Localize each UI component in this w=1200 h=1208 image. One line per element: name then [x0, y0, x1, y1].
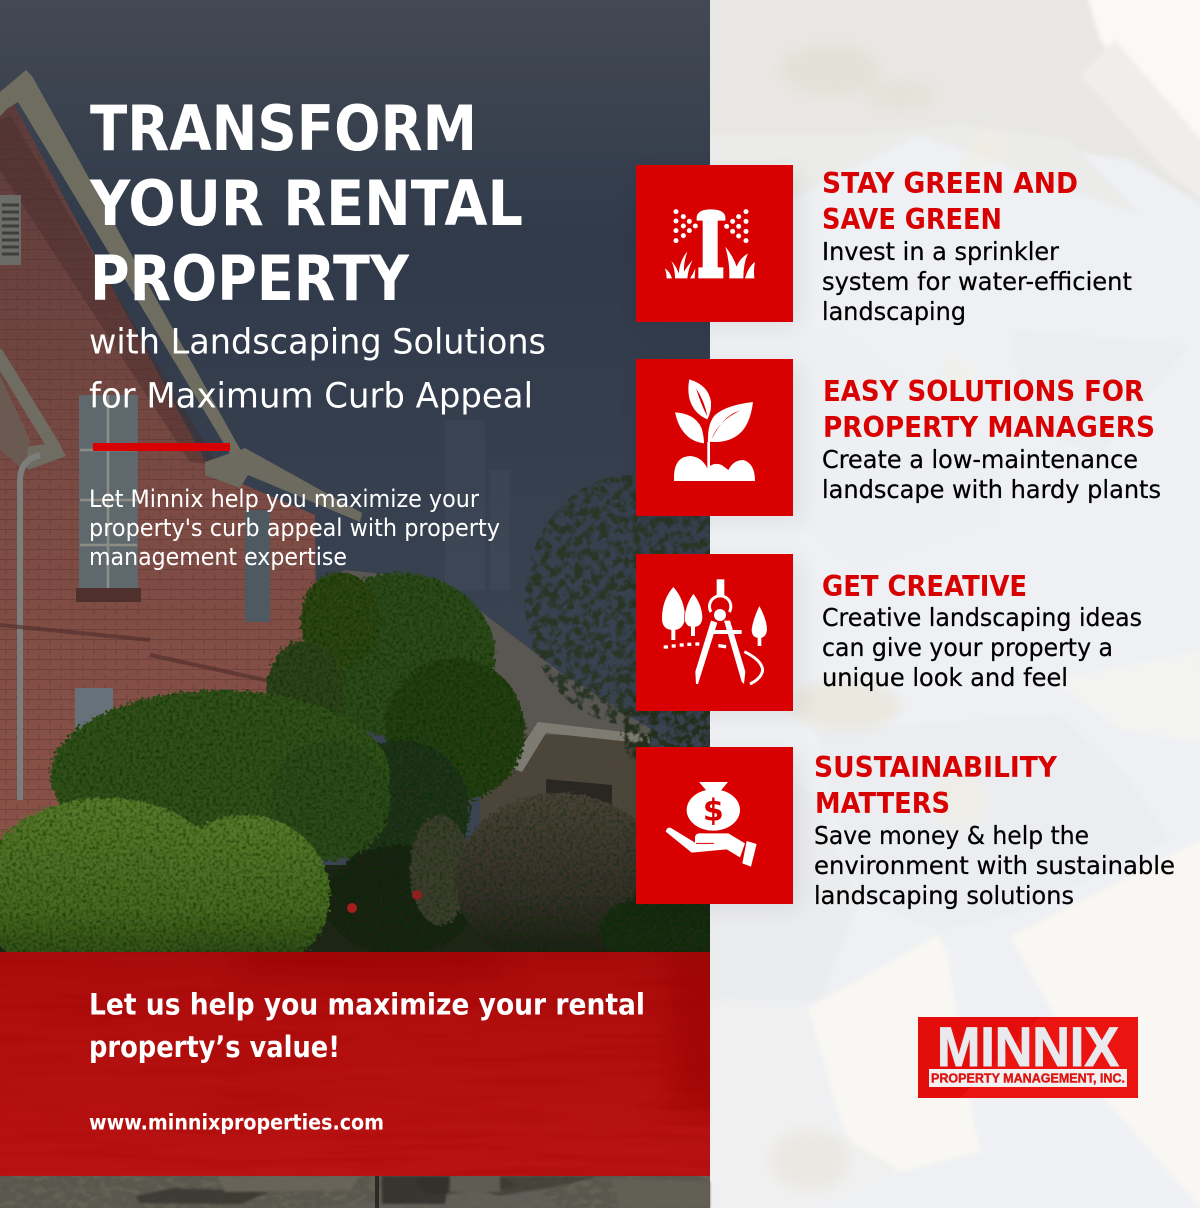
- heading: main title: YOUR RENTAL: [89, 167, 523, 240]
- text: intro paragraph: Let Minnix help you maximize your: [89, 485, 479, 513]
- text: get creative description: [822, 603, 1142, 692]
- heading: main title: [89, 92, 523, 315]
- item: stay green and save green: [636, 165, 1132, 326]
- text: intro paragraph: property's curb appeal with property: [89, 514, 500, 542]
- heading: stay green and save green: SAVE GREEN: [822, 203, 1002, 236]
- text: easy solutions description: Create a low-maintenance: [822, 445, 1138, 474]
- text: sustainability description: landscaping solutions: [814, 881, 1074, 910]
- text: sustainability description: [814, 821, 1175, 910]
- text: call-to-action headline: [89, 988, 645, 1064]
- heading: stay green and save green: [822, 167, 1078, 236]
- heading: main title: PROPERTY: [90, 242, 410, 315]
- text: sustainability description: environment with sustainable: [814, 851, 1175, 880]
- logo: Minnix Property Management: PROPERTY MANAGEMENT, INC.: [931, 1070, 1125, 1086]
- text: website address: www.minnixproperties.com: [89, 1110, 384, 1136]
- icon: sprinkler: [636, 165, 793, 322]
- heading: subtitle: with Landscaping Solutions: [89, 322, 546, 362]
- icon: hand holding money bag: [636, 747, 793, 904]
- text: stay green description: system for water-efficient: [822, 267, 1132, 296]
- heading: main title: TRANSFORM: [90, 92, 477, 165]
- heading: stay green and save green: STAY GREEN AND: [822, 167, 1078, 200]
- item: get creative: [636, 554, 1142, 711]
- text: intro paragraph: [89, 485, 500, 571]
- text: stay green description: Invest in a sprinkler: [822, 237, 1060, 266]
- icon: compass and trees: [636, 554, 793, 711]
- heading: subtitle: for Maximum Curb Appeal: [89, 376, 533, 416]
- heading: easy solutions for property managers: EASY SOLUTIONS FOR: [823, 375, 1144, 408]
- text: sustainability description: Save money & help the: [814, 821, 1089, 850]
- text: intro paragraph: management expertise: [89, 543, 347, 571]
- heading: sustainability matters: MATTERS: [815, 787, 950, 820]
- icon: hand holding money bag: $: [703, 794, 724, 829]
- heading: sustainability matters: [814, 751, 1057, 820]
- heading: easy solutions for property managers: [823, 375, 1155, 444]
- panel: aerial rooftop background: [700, 0, 1200, 1208]
- accent bar: [93, 443, 230, 451]
- panel: house photograph: [0, 0, 740, 986]
- item: easy solutions for property managers: [636, 359, 1161, 516]
- text: easy solutions description: [822, 445, 1161, 504]
- logo: Minnix Property Management: [918, 1015, 1138, 1098]
- heading: get creative: GET CREATIVE: [822, 570, 1027, 603]
- text: call-to-action headline: property’s value!: [89, 1030, 340, 1064]
- text: call-to-action headline: Let us help you maximize your rental: [89, 988, 645, 1022]
- heading: sustainability matters: SUSTAINABILITY: [814, 751, 1057, 784]
- logo: Minnix Property Management: MINNIX: [937, 1015, 1119, 1078]
- text: get creative description: unique look and feel: [822, 663, 1068, 692]
- item: sustainability matters: [636, 747, 1175, 910]
- card shadows: [640, 172, 800, 909]
- heading: subtitle: [89, 322, 546, 416]
- panel: red call-to-action band: [0, 940, 730, 1176]
- text: easy solutions description: landscape with hardy plants: [822, 475, 1161, 504]
- icon: sprouting plant: [636, 359, 793, 516]
- text: get creative description: can give your property a: [822, 633, 1113, 662]
- text: stay green description: landscaping: [822, 297, 966, 326]
- text: stay green description: [822, 237, 1132, 326]
- panel: stone wall strip: [0, 1170, 710, 1208]
- text: get creative description: Creative landscaping ideas: [822, 603, 1142, 632]
- heading: easy solutions for property managers: PROPERTY MANAGERS: [823, 411, 1155, 444]
